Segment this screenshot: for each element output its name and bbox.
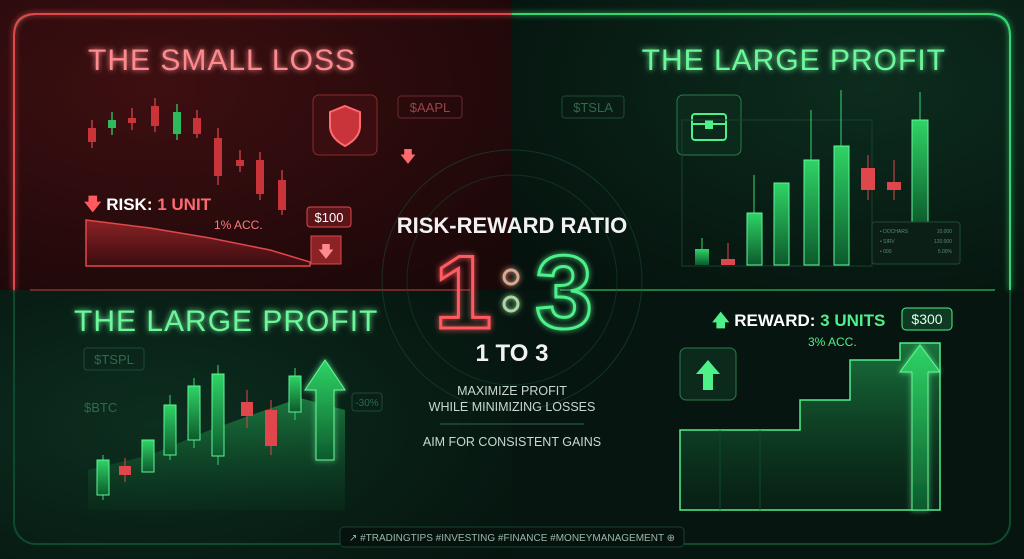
chart: top right candles: • 000 [880, 249, 892, 255]
callout: $100 [307, 207, 351, 264]
ratio 1:3 [434, 235, 593, 351]
ticker: aapl: $AAPL [410, 100, 450, 115]
center: risk-reward ratio: MAXIMIZE PROFIT [457, 384, 567, 398]
label: 1% acc: 1% ACC. [214, 218, 263, 232]
callout: $300 [902, 308, 952, 330]
chart: bottom right steps [680, 343, 940, 510]
callout: $100: $100 [315, 210, 343, 225]
ratio 1:3: 1 [434, 235, 492, 351]
center: risk-reward ratio: 1 TO 3 [476, 340, 548, 367]
center: risk-reward ratio: RISK-REWARD RATIO [397, 213, 627, 238]
chart: top right candles: 5.00% [938, 249, 953, 255]
icon: up arrow box [680, 348, 736, 400]
tickers bottom left: $BTC [84, 400, 117, 415]
tickers bottom left [84, 348, 382, 415]
ratio 1:3: 3 [535, 235, 593, 351]
chart: top right candles: 120.000 [934, 239, 952, 245]
center: risk-reward ratio: WHILE MINIMIZING LOSSES [429, 400, 595, 414]
tickers bottom left: $TSPL [94, 352, 134, 367]
chart: small loss candles [88, 98, 286, 215]
label: reward 3 units: 🡅 REWARD: 3 UNITS [712, 311, 885, 330]
footer hashtags: ↗ #TRADINGTIPS #INVESTING #FINANCE #MONEYMANAGEMENT ⊕ [349, 533, 675, 544]
icon: shield: 🡇 [400, 149, 416, 166]
callout: $100: 🡇 [318, 244, 334, 261]
title: the large profit bottom: THE LARGE PROFIT [74, 305, 378, 338]
label: risk 1 unit: 🡇 RISK: 1 UNIT [84, 195, 212, 214]
icon: shield [313, 95, 416, 166]
tickers bottom left: -30% [355, 398, 379, 409]
label: 3% acc: 3% ACC. [808, 335, 857, 349]
chart: bottom left candles [88, 360, 345, 510]
chart: top right candles: • SIRV [880, 239, 895, 245]
callout: $300: $300 [911, 311, 943, 327]
title: the large profit top: THE LARGE PROFIT [642, 44, 946, 77]
chart: top right candles [682, 90, 960, 266]
chart: top right candles: 10.000 [937, 229, 952, 235]
title: the small loss: THE SMALL LOSS [88, 44, 356, 77]
ticker: tsla [562, 96, 624, 118]
chart: top right candles: • DOCHARS [880, 229, 909, 235]
ticker: aapl [398, 96, 462, 118]
area: red loss [86, 220, 310, 266]
center: risk-reward ratio: AIM FOR CONSISTENT GAINS [423, 435, 601, 449]
icon: treasure chest [677, 95, 741, 155]
footer hashtags [340, 527, 684, 547]
ticker: tsla: $TSLA [573, 100, 613, 115]
center: risk-reward ratio [397, 213, 627, 449]
